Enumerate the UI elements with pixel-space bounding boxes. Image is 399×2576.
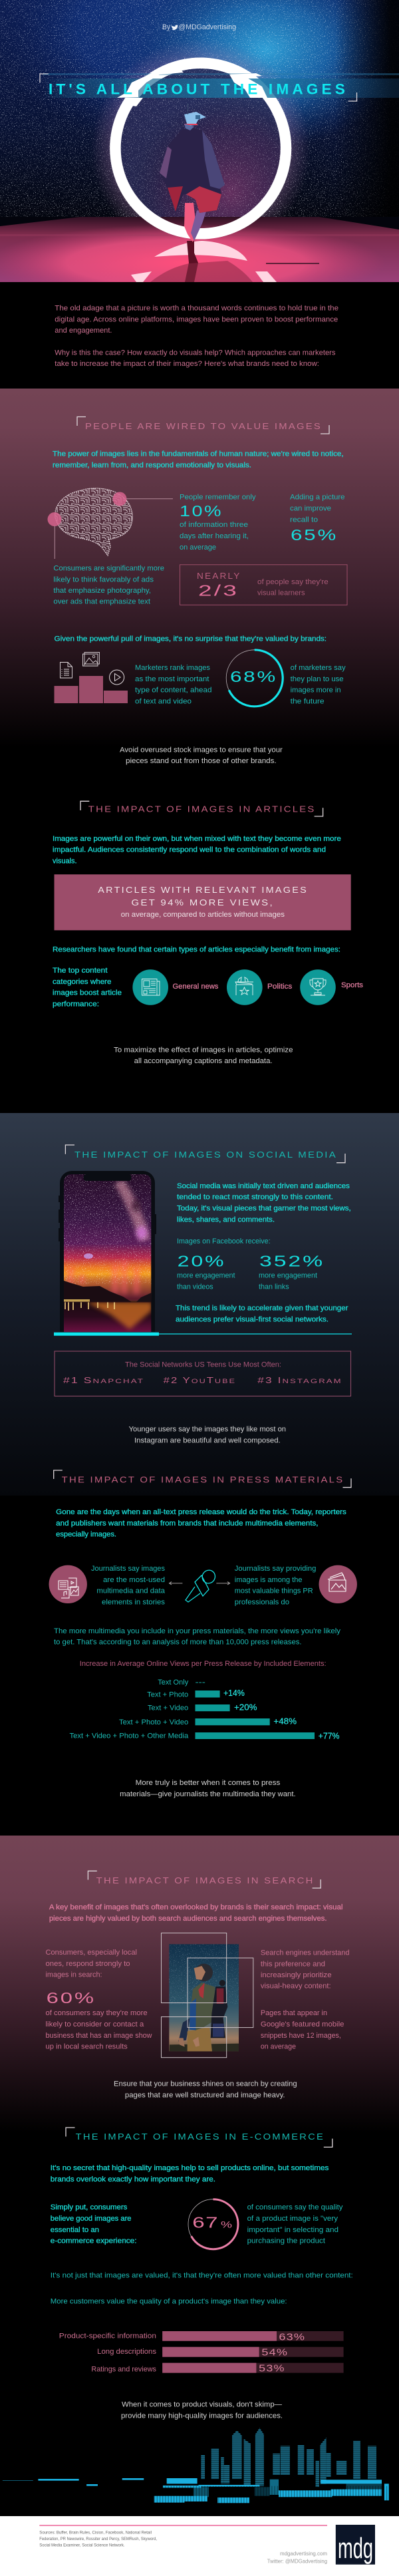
lead text: visuals. — [53, 857, 77, 865]
byline: By — [162, 23, 171, 31]
heading: THE IMPACT OF IMAGES IN ARTICLES — [88, 804, 316, 814]
tip: younger users — [129, 1426, 286, 1444]
comparison text — [51, 2272, 353, 2306]
top categories label: The top content — [53, 967, 108, 975]
heading — [66, 2128, 332, 2147]
bar chart: views per press release: +48% — [273, 1716, 297, 1726]
trend text: This trend is likely to accelerate given that younger — [176, 1305, 348, 1313]
icon: microphone with arrows — [169, 1567, 230, 1602]
heading — [80, 801, 323, 816]
lead text — [53, 450, 344, 470]
tip: stock images: pieces stand out from those of other brands. — [126, 757, 277, 765]
consumers text: Consumers are significantly more — [53, 564, 164, 572]
marketers rank text: type of content, ahead — [135, 687, 212, 695]
consumers text: likely to think favorably of ads — [53, 575, 154, 583]
icon: circuit brain — [48, 486, 173, 559]
glowing ring — [115, 63, 286, 234]
tip: product visuals: When it comes to product visuals, don't skimp— — [122, 2401, 282, 2409]
stat: 10 percent: days after hearing it, — [180, 532, 249, 540]
search engines text: snippets have 12 images, — [261, 2032, 341, 2040]
product image quality text: important" in selecting and — [247, 2226, 338, 2234]
marketers plan text — [291, 664, 346, 705]
stat: 65 percent: can improve — [290, 505, 331, 513]
bar chart: what customers value — [59, 2331, 344, 2374]
logo: mdg — [336, 2525, 375, 2565]
bar chart: views per press release: +77% — [319, 1731, 339, 1740]
heading: THE IMPACT OF IMAGES IN PRESS MATERIALS — [62, 1475, 344, 1485]
tip: captions: To maximize the effect of images in articles, optimize — [114, 1046, 293, 1054]
intro text: digital age. Across online platforms, images have been proven to boost performance — [55, 315, 338, 323]
bar chart: views per press release: --- — [196, 1679, 205, 1687]
heading — [65, 1145, 345, 1163]
lead text: likes, shares, and comments. — [177, 1215, 275, 1223]
figure — [150, 103, 253, 282]
panel: teen networks: #2 Y OU T UBE — [164, 1376, 236, 1385]
lead text: Today, it's visual pieces that garner the most views, — [177, 1205, 351, 1213]
consumers text: over ads that emphasize text — [53, 598, 150, 606]
tip: stock images — [120, 746, 283, 765]
bar chart: what customers value: Ratings and reviews — [91, 2365, 156, 2373]
comparison text: It's not just that images are valued, it's that they're often more valued than other content: — [51, 2272, 353, 2280]
product image quality text — [247, 2203, 343, 2245]
icon: politics: Politics — [267, 983, 292, 991]
trend text — [176, 1305, 348, 1324]
multimedia views text: to get. That's according to an analysis of more than 10,000 press releases. — [54, 1639, 302, 1647]
heading: PEOPLE ARE WIRED TO VALUE IMAGES — [85, 421, 322, 431]
marketers rank text: of text and video — [135, 697, 192, 705]
phone shelf line — [54, 1333, 352, 1336]
stats: facebook: 352% — [259, 1252, 325, 1269]
lead text: remember, learn from, and respond emotionally to visuals. — [53, 462, 251, 470]
stat: 65 percent: recall to — [290, 516, 318, 524]
journalists valuable text — [235, 1565, 316, 1607]
lead text: A key benefit of images that's often overlooked by brands is their search impact: visual — [49, 1903, 343, 1911]
consumers local text and 60 percent stat: business that has an image show — [45, 2032, 152, 2040]
donut: 68 percent: 68% — [230, 668, 277, 685]
tip: younger users: Instagram are beautiful and well composed. — [134, 1436, 281, 1444]
tip: more multimedia: More truly is better when it comes to press — [136, 1779, 280, 1787]
marketers plan text: of marketers say — [291, 664, 346, 672]
panel: teen networks — [55, 1351, 351, 1396]
byline: @MDGadvertising — [178, 23, 236, 31]
product image quality text: purchasing the product — [247, 2237, 325, 2245]
tip: product visuals — [121, 2401, 283, 2420]
stats: facebook: more engagement — [259, 1272, 317, 1280]
trend text: audiences prefer visual-first social networks. — [176, 1316, 329, 1324]
bar chart: views per press release: Text + Photo + Video — [119, 1718, 188, 1726]
intro text: Why is this the case? How exactly do visuals help? Which approaches can marketers — [55, 349, 336, 357]
sources: Social Media Examiner, Social Science Network. — [39, 2543, 125, 2548]
icon: general news: General news — [173, 983, 218, 991]
bar chart: views per press release: Increase in Average Online Views per Press Release by Included Elements: — [80, 1660, 327, 1668]
bar chart: views per press release: Text + Video + Photo + Other Media — [69, 1732, 188, 1740]
top categories label — [53, 967, 122, 1009]
bar chart: views per press release: Text + Photo — [147, 1690, 188, 1698]
heading — [54, 1470, 351, 1488]
callout: 94 percent more views — [55, 874, 351, 930]
tip: product visuals: provide many high-quality images for audiences. — [121, 2412, 283, 2420]
lead text: brands overlook exactly how important they are. — [51, 2175, 215, 2183]
lead text: It's no secret that high-quality images help to sell products online, but sometimes — [51, 2164, 329, 2172]
journalists most-used text — [91, 1565, 165, 1607]
tip: younger users: Younger users say the images they like most on — [129, 1426, 286, 1434]
consumers local text and 60 percent stat: images in search: — [45, 1971, 102, 1979]
tip: stock images: Avoid overused stock images to ensure that your — [120, 746, 283, 754]
panel: teen networks: #3 I NSTAGRAM — [257, 1376, 342, 1385]
title: IT'S ALL ABOUT THE IMAGES — [49, 81, 348, 98]
sources: Sources: Buffer, Brain Rules, Cision, Facebook, National Retail — [39, 2530, 152, 2535]
lead text: The power of images lies in the fundamentals of human nature; we're wired to notice, — [53, 450, 344, 458]
tip: captions — [114, 1046, 293, 1065]
callout: nearly two thirds: NEARLY — [197, 571, 241, 581]
tip: more multimedia — [120, 1779, 296, 1798]
top categories label: performance: — [53, 1001, 99, 1009]
tip: shine on search — [114, 2080, 297, 2099]
icon: photos — [319, 1565, 357, 1603]
callout: 94 percent more views: ARTICLES WITH RELEVANT IMAGES — [98, 886, 308, 895]
byline — [162, 24, 235, 31]
journalists valuable text: professionals do — [235, 1599, 289, 1607]
journalists most-used text: Journalists say images — [91, 1565, 165, 1573]
icon: multimedia — [49, 1565, 87, 1603]
search engines text — [261, 1949, 349, 2051]
callout: 94 percent more views: GET 94% MORE VIEWS, — [132, 898, 274, 907]
lead text: Images are powerful on their own, but when mixed with text they become even more — [53, 835, 341, 843]
stat: 65 percent: 65% — [291, 526, 338, 544]
panel: teen networks: #1 S NAPCHAT — [63, 1376, 144, 1385]
search engines text: this preference and — [261, 1960, 325, 1968]
heading — [88, 1871, 321, 1888]
bar chart: views per press release: +14% — [223, 1689, 245, 1698]
marketers plan text: they plan to use — [291, 675, 344, 683]
search engines text: Search engines understand — [261, 1949, 349, 1957]
marketers plan text: images more in — [291, 687, 341, 695]
donut: 68 percent — [226, 650, 283, 707]
search engines text: on average — [261, 2043, 296, 2051]
bar chart: what customers value: 54% — [261, 2347, 288, 2358]
tip: captions: all accompanying captions and metadata. — [134, 1057, 273, 1065]
stat: 65 percent: Adding a picture — [290, 494, 345, 502]
consumers local text and 60 percent stat: up in local search results — [45, 2043, 128, 2051]
stat: 10 percent: of information three — [180, 521, 248, 529]
lead text — [53, 835, 341, 865]
heading: THE IMPACT OF IMAGES ON SOCIAL MEDIA — [74, 1150, 337, 1160]
stats: facebook: more engagement — [177, 1272, 235, 1280]
lead text — [49, 1903, 343, 1923]
icon: politics — [227, 969, 292, 1005]
tip: more multimedia: materials—give journalists the multimedia they want. — [120, 1790, 296, 1798]
bar chart: views per press release — [69, 1660, 339, 1740]
callout: nearly two thirds: visual learners — [257, 589, 305, 597]
bar chart: views per press release: Text Only — [158, 1679, 189, 1687]
consumers local text and 60 percent stat: likely to consider or contact a — [45, 2020, 144, 2028]
product image quality text: of consumers say the quality — [247, 2203, 343, 2211]
essential text: Simply put, consumers — [51, 2203, 127, 2211]
stats: facebook — [177, 1237, 325, 1291]
bar chart: what customers value: 63% — [279, 2331, 305, 2342]
lead text — [56, 1508, 346, 1539]
icon: general news — [132, 969, 218, 1005]
lead text: and publishers want materials from brands that include multimedia elements, — [56, 1520, 319, 1528]
search engines text: Pages that appear in — [261, 2009, 327, 2017]
stat: 10 percent: on average — [180, 544, 216, 552]
donut: 67 percent: % — [221, 2219, 232, 2230]
essential text: essential to an — [51, 2226, 99, 2234]
heading: THE IMPACT OF IMAGES IN E-COMMERCE — [76, 2132, 325, 2142]
stat: 65 percent — [290, 494, 345, 544]
multimedia views text — [54, 1627, 341, 1647]
footer — [39, 2525, 375, 2565]
lead text: Gone are the days when an all-text press release would do the trick. Today, reporters — [56, 1508, 346, 1516]
intro text: The old adage that a picture is worth a thousand words continues to hold true in the — [55, 305, 338, 313]
panel: images in search — [45, 1871, 349, 2099]
consumers text — [53, 564, 164, 606]
lead text: Social media was initially text driven and audiences — [177, 1182, 350, 1190]
lead text — [177, 1182, 351, 1223]
comparison text: More customers value the quality of a product's image than they value: — [51, 2298, 287, 2306]
consumers local text and 60 percent stat: 60% — [47, 1989, 96, 2007]
bar chart: what customers value: Long descriptions — [97, 2348, 156, 2356]
panel: images in articles — [53, 801, 363, 1065]
stat: 10 percent: 10% — [180, 502, 223, 520]
contact — [267, 2550, 327, 2564]
icon: sports: Sports — [341, 981, 363, 989]
lead text: tended to react most strongly to this content. — [177, 1194, 333, 1202]
chart: content type podium — [55, 652, 128, 703]
tip: shine on search: Ensure that your business shines on search by creating — [114, 2080, 297, 2088]
lead text — [51, 2164, 329, 2183]
contact: mdgadvertising.com — [280, 2550, 327, 2557]
title band — [43, 73, 399, 98]
panel: images in e-commerce — [51, 2128, 353, 2420]
multimedia views text: The more multimedia you include in your press materials, the more views you're likely — [54, 1627, 341, 1635]
callout: 94 percent more views: on average, compared to articles without images — [121, 911, 285, 919]
icon: sports — [300, 969, 363, 1005]
panel: teen networks: The Social Networks US Teens Use Most Often: — [125, 1361, 281, 1369]
marketers rank text: as the most important — [135, 675, 209, 683]
logo: mdg: mdg — [338, 2532, 373, 2565]
top categories label: images boost article — [53, 989, 122, 997]
phone with night-sky photo — [59, 1171, 156, 1332]
journalists most-used text: are the most-used — [103, 1576, 165, 1584]
top categories label: categories where — [53, 978, 112, 986]
tip: shine on search: pages that are well structured and image heavy. — [125, 2091, 285, 2099]
bar chart: views per press release: Text + Video — [148, 1704, 188, 1712]
stat: 10 percent — [180, 494, 256, 552]
consumers local text and 60 percent stat: Consumers, especially local — [45, 1949, 137, 1957]
consumers text: that emphasize photography, — [53, 587, 151, 595]
stats: facebook: than videos — [177, 1283, 213, 1291]
consumers local text and 60 percent stat: of consumers say they're more — [45, 2009, 148, 2017]
journalists valuable text: Journalists say providing — [235, 1565, 316, 1573]
heading: THE IMPACT OF IMAGES IN SEARCH — [96, 1875, 315, 1885]
sources — [39, 2530, 157, 2548]
intro text: and engagement. — [55, 327, 112, 335]
donut: 67 percent: 67 — [192, 2214, 219, 2231]
glitch shards — [117, 70, 267, 106]
essential text: believe good images are — [51, 2215, 132, 2223]
subheading: valued by brands: Given the powerful pull of images, it's no surprise that they're valued by brands: — [55, 635, 327, 643]
stats: facebook: than links — [259, 1283, 289, 1291]
journalists valuable text: images is among the — [235, 1576, 303, 1584]
callout: nearly two thirds: of people say they're — [257, 578, 329, 586]
hero illustration — [0, 0, 399, 301]
intro text — [55, 305, 338, 368]
marketers plan text: the future — [291, 697, 325, 705]
consumers local text and 60 percent stat — [45, 1949, 152, 2051]
callout: nearly two thirds: 2/3 — [198, 581, 239, 599]
photo: boy with jetpack — [169, 1944, 239, 2051]
stat: 10 percent: People remember only — [180, 494, 256, 502]
panel: people are wired to value images — [48, 416, 347, 765]
search engines text: Google's featured mobile — [261, 2020, 344, 2028]
search engines text: visual-heavy content: — [261, 1983, 331, 1991]
consumers local text and 60 percent stat: ones, respond strongly to — [45, 1960, 130, 1968]
neon city skyline — [0, 2428, 399, 2506]
essential text: e-commerce experience: — [51, 2237, 137, 2245]
contact: Twitter: @MDGadvertising — [267, 2557, 327, 2564]
donut: 67 percent — [188, 2199, 238, 2249]
panel: images in press materials — [49, 1470, 357, 1798]
marketers rank text: Marketers rank images — [135, 664, 210, 672]
essential text — [51, 2203, 137, 2245]
bar chart: what customers value: Product-specific information — [59, 2333, 156, 2340]
panel: images on social media — [54, 1145, 352, 1444]
heading — [77, 416, 329, 434]
journalists most-used text: elements in stories — [102, 1599, 165, 1607]
intro text: take to increase the impact of their images? Here's what brands need to know: — [55, 360, 319, 368]
subheading: researchers: Researchers have found that certain types of articles especially benefit from images: — [53, 945, 340, 953]
callout: nearly two thirds — [180, 565, 347, 605]
lead text: impactful. Audiences consistently respond well to the combination of words and — [53, 846, 326, 854]
journalists most-used text: multimedia and data — [96, 1587, 165, 1595]
journalists valuable text: most valuable things PR — [235, 1587, 313, 1595]
product image quality text: of a product image is "very — [247, 2215, 338, 2223]
lead text: especially images. — [56, 1531, 116, 1539]
bar chart: views per press release: +20% — [234, 1702, 257, 1712]
bar chart: what customers value: 53% — [259, 2363, 285, 2374]
floor reflection — [131, 241, 277, 282]
stats: facebook: 20% — [178, 1252, 225, 1269]
search engines text: increasingly prioritize — [261, 1971, 332, 1979]
lead text: pieces are highly valued by both search audiences and search engines themselves. — [49, 1915, 327, 1923]
stats: facebook: Images on Facebook receive: — [177, 1237, 271, 1245]
sources: Federation, PR Newswire, Rossiter and Percy, SEMRush, Skyword, — [39, 2537, 157, 2541]
marketers rank text — [135, 664, 212, 705]
title brackets — [40, 74, 356, 101]
overlapping frames — [161, 1933, 253, 2058]
